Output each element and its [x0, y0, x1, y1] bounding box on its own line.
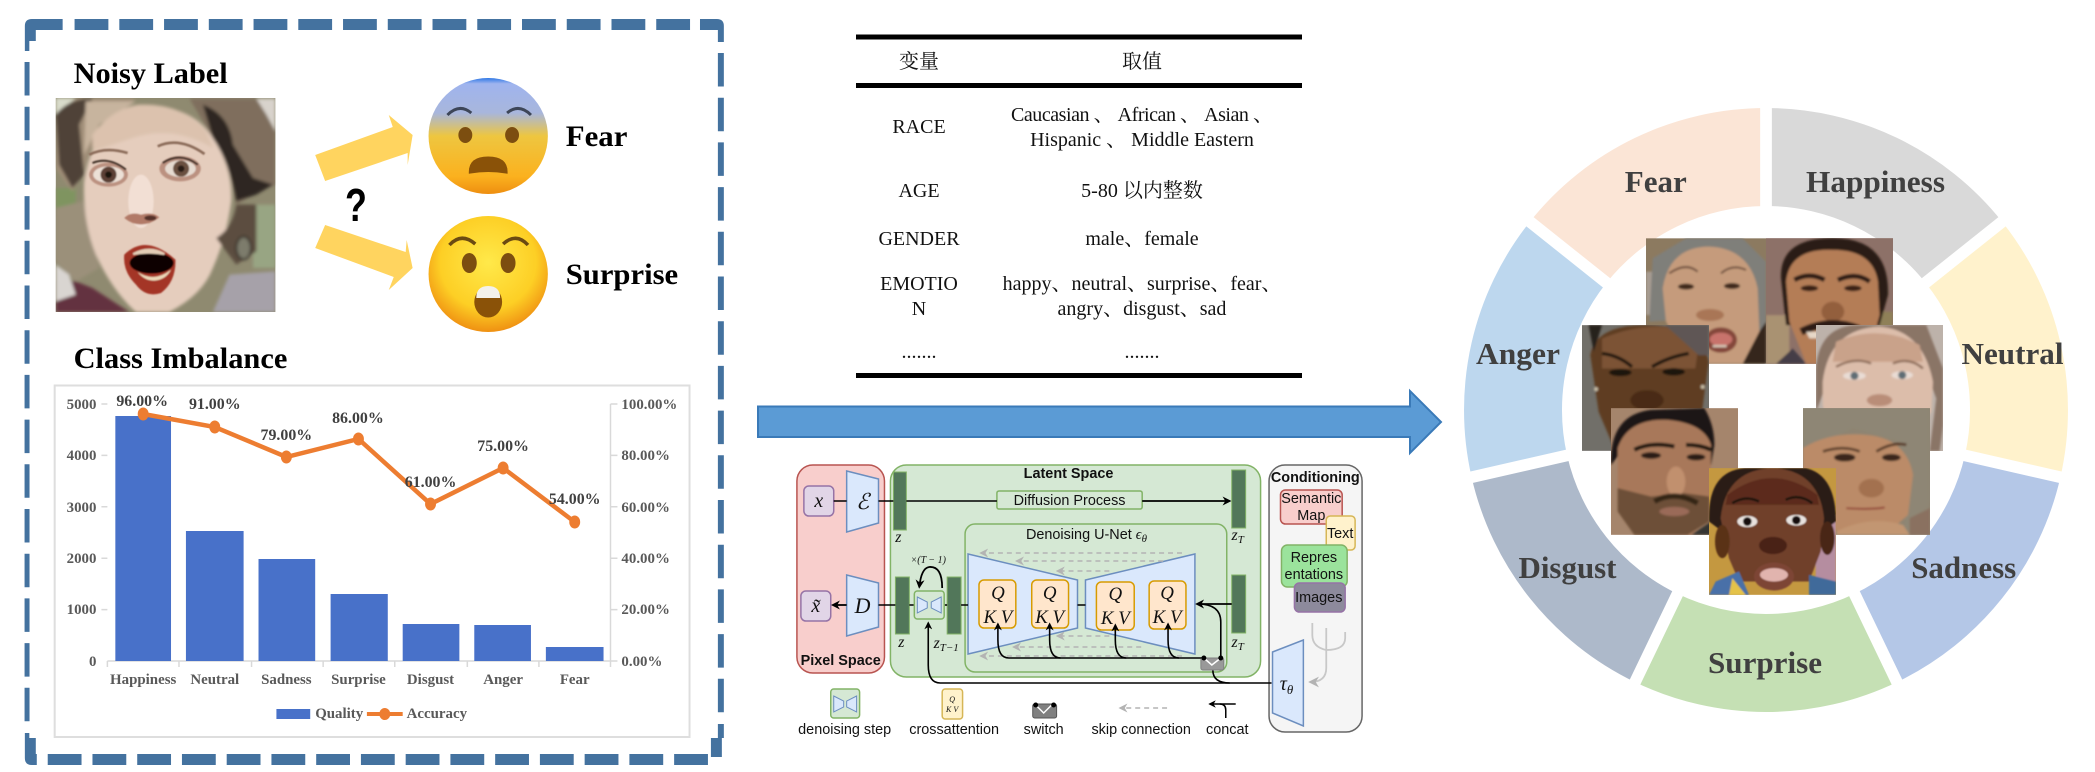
- arrow: big blue: [758, 391, 1441, 453]
- right axis labels: 60.00%: [621, 500, 670, 516]
- panel: latent space: [890, 465, 1261, 677]
- panel: pixel space: x̃: [810, 595, 821, 617]
- panel: conditioning: Semantic: [1281, 491, 1341, 507]
- panel: latent space: z: [894, 529, 902, 546]
- accuracy data labels: 86.00%: [332, 410, 384, 427]
- panel: denoising U-Net: Q: [1043, 583, 1057, 604]
- panel: denoising U-Net: K V: [982, 607, 1015, 628]
- photo: smiling man: [1766, 238, 1893, 364]
- segment: Surprise: [1635, 594, 1897, 712]
- photo: young girl: [1816, 325, 1943, 451]
- photo: angry woman: [1582, 325, 1709, 451]
- right axis labels: 40.00%: [621, 551, 670, 567]
- table: variables and values: male、female: [1085, 228, 1199, 250]
- legend: diagram key: denoising step: [798, 722, 891, 738]
- photo: surprised boy: [1709, 468, 1836, 595]
- segment: Happiness: Happiness: [1806, 164, 1945, 199]
- question mark: ?: [345, 179, 367, 231]
- chart: emotion donut: [1462, 100, 2070, 712]
- accuracy data labels: 79.00%: [261, 427, 312, 444]
- panel: latent space: ×(T − 1): [911, 555, 947, 566]
- panel: noisy label and class imbalance: [25, 19, 724, 765]
- panel: conditioning: Text: [1327, 526, 1353, 542]
- left axis labels: 1000: [67, 602, 96, 618]
- accuracy data labels: 54.00%: [549, 491, 601, 508]
- segment: Fear: Fear: [1625, 164, 1687, 199]
- heading: Class Imbalance: Class Imbalance: [74, 342, 287, 375]
- category labels: [110, 672, 590, 688]
- table: variables and values: N: [912, 298, 926, 320]
- segment: Sadness: [1854, 455, 2060, 682]
- icon: surprise emoji: [429, 216, 548, 332]
- legend: [276, 706, 468, 722]
- right axis labels: [621, 397, 677, 670]
- category labels: Happiness: [110, 672, 176, 688]
- panel: pixel space: D: [854, 593, 871, 618]
- left axis labels: 4000: [67, 448, 96, 464]
- panel: conditioning: Conditioning: [1271, 470, 1360, 486]
- category labels: Anger: [483, 672, 523, 688]
- panel: pixel space: x: [813, 490, 823, 512]
- panel: pixel space: ℰ: [856, 489, 872, 514]
- panel: conditioning: θ: [1287, 682, 1294, 697]
- chart: quality bars and accuracy line: [55, 386, 690, 737]
- panel: denoising U-Net: K V: [1100, 608, 1132, 629]
- table: variables and values: Caucasian 、 African 、 Asian 、: [1011, 104, 1273, 126]
- table: variables and values: happy、neutral、surprise、fear、: [1003, 273, 1281, 295]
- label: Fear: Fear: [566, 120, 627, 153]
- segment: Anger: [1464, 222, 1606, 477]
- panel: pixel space: Pixel Space: [801, 653, 881, 669]
- segment: Anger: Anger: [1476, 336, 1560, 371]
- table: variables and values: AGE: [898, 180, 940, 202]
- arrow: to fear: [315, 115, 413, 181]
- photo: elderly woman: [1803, 408, 1930, 535]
- icon: switch: [1201, 656, 1224, 670]
- segment: Surprise: Surprise: [1708, 645, 1822, 680]
- left axis labels: 0: [89, 654, 96, 670]
- bars: [115, 416, 604, 661]
- panel: denoising U-Net: Q: [1108, 584, 1122, 605]
- legend: diagram key: switch: [1024, 722, 1064, 738]
- legend: diagram key: skip connection: [1091, 722, 1191, 738]
- panel: conditioning: entations: [1285, 567, 1343, 583]
- table: variables and values: EMOTIO: [880, 273, 958, 295]
- segment: Neutral: [1926, 222, 2068, 477]
- accuracy line: [138, 408, 580, 528]
- legend: diagram key: K V: [945, 705, 959, 714]
- panel: denoising U-Net: Denoising U-Net ϵ: [1026, 527, 1142, 543]
- segment: Disgust: Disgust: [1518, 550, 1617, 585]
- table: variables and values: angry、disgust、sad: [1058, 298, 1226, 320]
- diagram: latent diffusion architecture: [797, 465, 1362, 738]
- segment: Happiness: [1766, 108, 2002, 283]
- left axis labels: 3000: [67, 500, 96, 516]
- panel: conditioning: Map: [1297, 508, 1325, 524]
- panel: latent space: Latent Space: [1024, 466, 1113, 482]
- table: variables and values: [856, 34, 1302, 378]
- panel: latent space: T: [1238, 641, 1245, 653]
- legend: Quality: [315, 706, 364, 722]
- category labels: Fear: [560, 672, 590, 688]
- right axis labels: 100.00%: [621, 397, 677, 413]
- segment: Sadness: Sadness: [1911, 550, 2016, 585]
- accuracy data labels: 61.00%: [405, 474, 456, 491]
- panel: pixel space: [797, 465, 884, 673]
- segment: Fear: [1530, 108, 1766, 283]
- panel: latent space: z: [897, 634, 904, 651]
- label: Surprise: Surprise: [566, 258, 678, 291]
- category labels: Disgust: [407, 672, 454, 688]
- right axis labels: 0.00%: [621, 654, 662, 670]
- icon: denoising step box: [914, 591, 944, 619]
- photo: frowning man: [1611, 408, 1738, 535]
- panel: denoising U-Net: Q: [991, 583, 1005, 604]
- legend: diagram key: concat: [1206, 722, 1248, 738]
- panel: conditioning: τ: [1280, 673, 1287, 695]
- table: variables and values: 取值: [1122, 50, 1162, 73]
- photo: elderly Asian woman: [1646, 238, 1766, 364]
- dashed border: [25, 19, 724, 765]
- table: variables and values: 5-80 以内整数: [1081, 179, 1203, 202]
- category labels: Neutral: [190, 672, 239, 688]
- panel: denoising U-Net: [965, 524, 1227, 672]
- panel: latent space: z: [1232, 527, 1238, 544]
- left axis labels: 5000: [67, 397, 96, 413]
- table: variables and values: RACE: [892, 116, 946, 138]
- legend: diagram key: [798, 689, 1248, 738]
- legend: diagram key: Q: [949, 695, 955, 704]
- heading: Noisy Label: Noisy Label: [74, 57, 228, 90]
- accuracy data labels: 75.00%: [477, 438, 529, 455]
- panel: denoising U-Net: K V: [1152, 607, 1184, 628]
- panel: latent space: T: [1238, 534, 1245, 546]
- panel: conditioning: Images: [1295, 590, 1342, 606]
- legend: Accuracy: [407, 706, 468, 722]
- panel: denoising U-Net: K V: [1034, 607, 1066, 628]
- left axis labels: [67, 397, 96, 670]
- right axis labels: 80.00%: [621, 448, 670, 464]
- arrow: to surprise: [315, 225, 413, 290]
- table: variables and values: 变量: [899, 50, 939, 73]
- segment: Disgust: [1472, 455, 1678, 682]
- accuracy data labels: 96.00%: [116, 393, 168, 410]
- panel: denoising U-Net: Q: [1160, 583, 1174, 604]
- panel: denoising U-Net: θ: [1142, 533, 1148, 545]
- table: variables and values: .......: [902, 341, 936, 363]
- left axis labels: 2000: [67, 551, 96, 567]
- accuracy data labels: [116, 393, 601, 508]
- table: variables and values: Hispanic 、 Middle Eastern: [1030, 129, 1254, 151]
- icon: fear emoji: [429, 78, 548, 194]
- panel: latent space: T−1: [940, 642, 959, 654]
- panel: latent space: z: [934, 635, 940, 652]
- panel: latent space: Diffusion Process: [1014, 493, 1126, 509]
- category labels: Surprise: [331, 672, 386, 688]
- category labels: Sadness: [261, 672, 312, 688]
- segment: Neutral: Neutral: [1962, 336, 2064, 371]
- right axis labels: 20.00%: [621, 602, 670, 618]
- accuracy data labels: 91.00%: [189, 396, 241, 413]
- legend: diagram key: crossattention: [909, 722, 999, 738]
- photo: surprised woman: [56, 98, 276, 312]
- panel: conditioning: [1269, 465, 1362, 732]
- table: variables and values: GENDER: [878, 228, 960, 250]
- connectors: [833, 501, 1272, 683]
- table: variables and values: .......: [1124, 341, 1160, 363]
- panel: latent space: z: [1232, 634, 1238, 651]
- panel: conditioning: Repres: [1291, 550, 1337, 566]
